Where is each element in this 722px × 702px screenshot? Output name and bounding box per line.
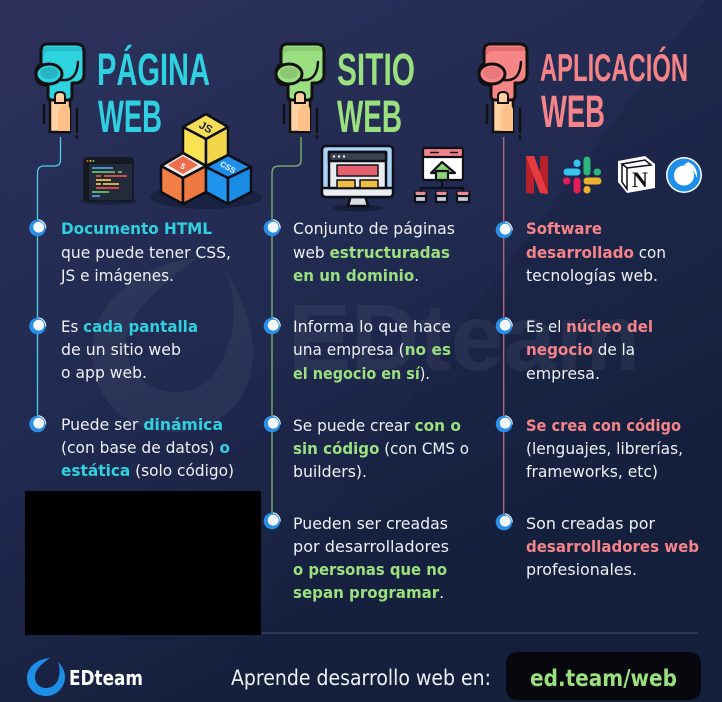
watermark: EDteam: EDteam <box>288 285 640 391</box>
text: software desarrollado <box>526 219 666 285</box>
text: cada pantalla: Es cada pantalla <box>61 317 198 336</box>
column 1: página web <box>29 44 262 480</box>
text: estructuradas en un dominio <box>293 219 455 285</box>
text: con o sin código: builders). <box>293 462 367 481</box>
text: se crea con código: Se crea con código <box>526 416 681 435</box>
text: cada pantalla <box>61 317 198 382</box>
heading: sitio web: WEB <box>337 91 402 142</box>
text: documento html: Documento HTML <box>61 219 212 238</box>
icon: html css js cubes: CSS <box>218 159 238 176</box>
icon: code window <box>79 158 137 205</box>
heading: sitio web <box>337 44 415 142</box>
text: desarrolladores web: Son creadas por <box>526 514 655 533</box>
text: software desarrollado: Software <box>526 219 602 238</box>
column 3: aplicación web <box>479 44 702 579</box>
text: creadas por desarrolladores <box>293 514 449 602</box>
timeline: red <box>496 137 512 530</box>
text: dinámica o estática: (con base de datos) o <box>61 438 230 457</box>
text: no es el negocio <box>293 317 451 383</box>
text: núcleo del negocio: negocio de la <box>526 340 635 359</box>
timeline: green <box>264 137 301 529</box>
icon: html css js cubes <box>150 114 262 209</box>
button: ed.team/web <box>506 652 701 700</box>
heading: sitio web: SITIO <box>337 44 415 95</box>
icon: fist red <box>479 44 527 138</box>
icon: html css js cubes: 5 <box>179 161 187 172</box>
text: se crea con código <box>526 416 683 481</box>
text: dinámica o estática: estática (solo código) <box>61 461 234 480</box>
heading: aplicación web: WEB <box>541 86 605 137</box>
column 2: sitio web <box>264 44 469 602</box>
text: cada pantalla: o app web. <box>61 363 147 382</box>
text: no es el negocio: Informa lo que hace <box>293 317 451 336</box>
text: creadas por desarrolladores: Pueden ser creadas <box>293 514 448 533</box>
text: núcleo del negocio: empresa. <box>526 364 600 383</box>
text: con o sin código: Se puede crear con o <box>293 416 461 435</box>
text: se crea con código: frameworks, etc) <box>526 462 658 481</box>
text: documento html: JS e imágenes. <box>60 266 174 285</box>
text: documento html: que puede tener CSS, <box>61 243 231 262</box>
text: creadas por desarrolladores: o personas que no <box>293 560 447 579</box>
icon: edteam circle <box>666 157 702 193</box>
text: con o sin código: sin código (con CMS o <box>293 439 469 458</box>
icon: notion: N <box>632 167 648 192</box>
text: desarrolladores web <box>526 514 699 579</box>
text: documento html <box>60 219 231 285</box>
text: software desarrollado: desarrollado con <box>526 243 666 262</box>
icon: fist green <box>276 44 324 138</box>
text: no es el negocio: el negocio en sí). <box>293 364 430 383</box>
heading: página web: WEB <box>98 91 162 142</box>
text: creadas por desarrolladores: por desarrolladores <box>293 537 449 556</box>
timeline: cyan <box>29 137 60 432</box>
button: ed.team/web: ed.team/web <box>530 666 677 692</box>
text: dinámica o estática <box>61 415 234 480</box>
icon: slack <box>566 160 598 190</box>
icon: site map <box>415 148 469 202</box>
text: software desarrollado: tecnologías web. <box>526 266 658 285</box>
icon: fist cyan <box>36 44 84 138</box>
text: aprende desarrollo web: Aprende desarrollo web en: <box>231 666 491 690</box>
text: estructuradas en un dominio: Conjunto de páginas <box>293 219 455 238</box>
redacted black box <box>25 491 261 635</box>
footer <box>27 652 701 700</box>
heading: aplicación web <box>540 46 688 137</box>
icon: netflix <box>526 156 548 194</box>
watermark: EDteam <box>92 258 640 432</box>
text: se crea con código: (lenguajes, librerías, <box>526 439 683 458</box>
text: núcleo del negocio: Es el núcleo del <box>526 317 653 336</box>
icon: html css js cubes: JS <box>197 119 214 136</box>
text: no es el negocio: una empresa (no es <box>293 340 451 359</box>
text: núcleo del negocio <box>526 317 653 383</box>
heading: página web <box>97 44 210 142</box>
text: dinámica o estática: Puede ser dinámica <box>61 415 223 434</box>
text: estructuradas en un dominio: en un dominio. <box>293 266 419 285</box>
text: creadas por desarrolladores: sepan programar. <box>293 583 444 602</box>
icon: notion <box>618 156 655 193</box>
heading: página web: PÁGINA <box>97 44 210 95</box>
logo: edteam <box>27 658 143 696</box>
text: desarrolladores web: profesionales. <box>526 560 637 579</box>
logo: edteam: EDteam <box>69 666 143 690</box>
text: con o sin código <box>293 416 469 481</box>
icon: monitor <box>322 146 393 212</box>
text: cada pantalla: de un sitio web <box>61 340 181 359</box>
text: desarrolladores web: desarrolladores web <box>526 537 699 556</box>
text: estructuradas en un dominio: web estructuradas <box>293 243 450 262</box>
